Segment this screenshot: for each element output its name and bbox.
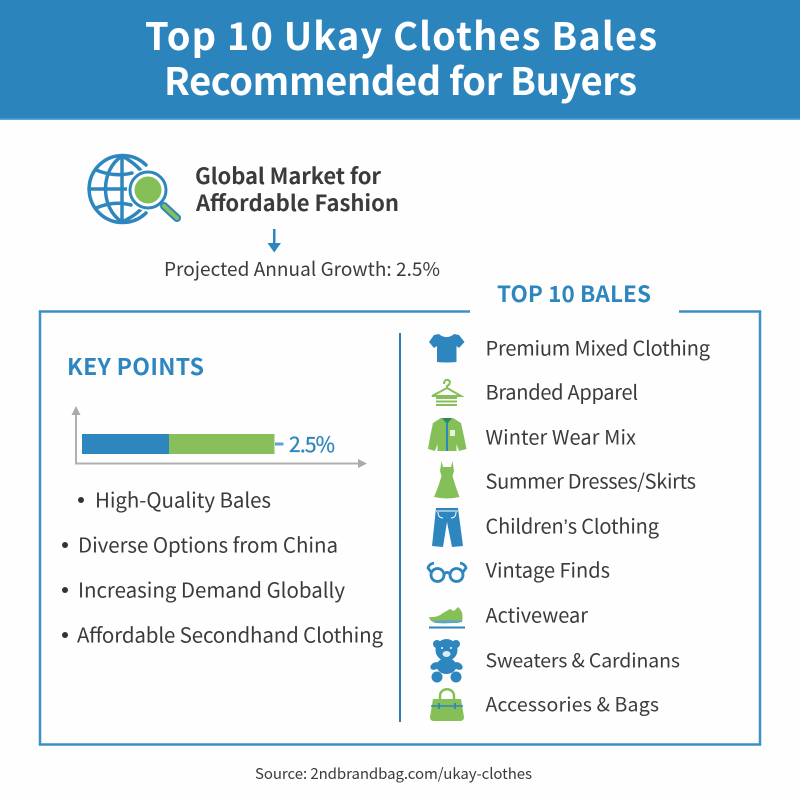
text: summer dresses/skirts: Summer Dresses/Skirts bbox=[486, 466, 696, 494]
heading: global market: Global Market for bbox=[195, 159, 381, 191]
bullet list: High-Quality Bales bbox=[95, 484, 271, 514]
text: accessories & bags: Accessories & Bags bbox=[486, 688, 659, 718]
text: children's clothing: Children’s Clothing bbox=[486, 510, 659, 540]
icon: sneaker bbox=[429, 607, 465, 628]
icon: hanger bbox=[432, 380, 461, 405]
icon: globe with magnifier bbox=[89, 155, 177, 222]
panel: top 10 list bbox=[428, 332, 710, 721]
icon: dress bbox=[434, 461, 460, 498]
icon: glasses bbox=[428, 563, 466, 582]
heading: top 10 bales: TOP 10 BALES bbox=[497, 277, 651, 309]
bullet list bbox=[62, 484, 383, 648]
title: Recommended for Buyers bbox=[164, 51, 637, 106]
heading: key points: KEY POINTS bbox=[67, 348, 204, 382]
icon: jacket bbox=[428, 418, 466, 451]
title: Top 10 Ukay Clothes Bales bbox=[145, 6, 657, 61]
arrow: down bbox=[268, 229, 281, 252]
bar chart bbox=[72, 406, 367, 468]
bullet list: Affordable Secondhand Clothing bbox=[77, 618, 383, 648]
text: activewear: Activewear bbox=[486, 600, 588, 628]
icon: t-shirt bbox=[429, 334, 464, 362]
icon: teddy bear bbox=[429, 639, 464, 682]
text: branded apparel: Branded Apparel bbox=[486, 376, 638, 406]
text: projected growth: Projected Annual Growth: 2.5% bbox=[164, 255, 440, 282]
icon: handbag bbox=[430, 689, 464, 721]
panel: main frame bbox=[40, 312, 760, 744]
text: vintage finds: Vintage Finds bbox=[486, 554, 610, 584]
text: sweaters & cardinans: Sweaters & Cardinans bbox=[486, 644, 680, 674]
text: winter wear mix: Winter Wear Mix bbox=[486, 422, 636, 450]
heading: global market: Affordable Fashion bbox=[195, 186, 399, 218]
heading: global market bbox=[195, 159, 399, 218]
icon: jeans bbox=[432, 508, 463, 547]
text: premium mixed clothing: Premium Mixed Clothing bbox=[486, 332, 710, 362]
bullet list: Diverse Options from China bbox=[78, 528, 338, 558]
title bbox=[145, 6, 657, 106]
bullet list: Increasing Demand Globally bbox=[78, 574, 345, 604]
bar chart: 2.5% bbox=[289, 429, 335, 459]
divider bbox=[399, 333, 401, 722]
panel: key points bbox=[62, 348, 383, 648]
source: Source: 2ndbrandbag.com/ukay-clothes bbox=[255, 763, 532, 784]
title banner bbox=[0, 0, 800, 120]
